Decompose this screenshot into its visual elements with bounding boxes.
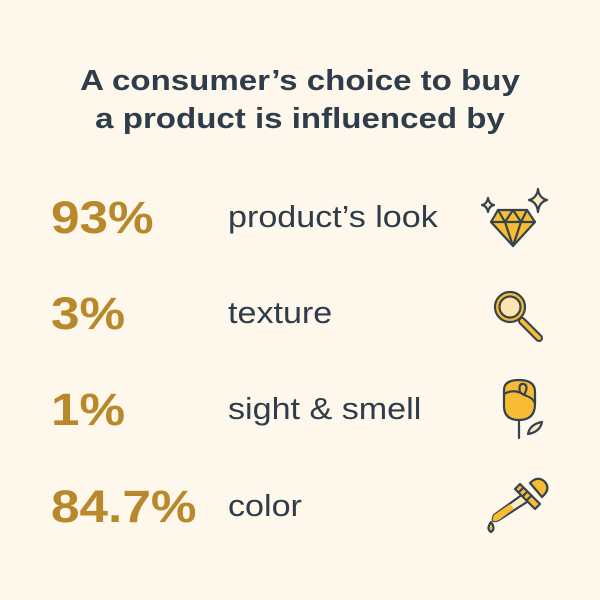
stat: 93%: 93% (51, 192, 154, 243)
stat: 1%: 1% (51, 384, 125, 435)
title (80, 65, 520, 135)
stat: 84.7%: 84.7% (51, 481, 196, 532)
label: product's look: product’s look (228, 199, 438, 234)
stat: 3%: 3% (51, 288, 125, 339)
label: color: color (228, 488, 302, 523)
title: A consumer’s choice to buy (80, 65, 520, 97)
title: a product is influenced by (95, 103, 505, 135)
label: sight & smell: sight & smell (228, 391, 421, 426)
icon: magnifier (495, 292, 539, 338)
icon: dropper (488, 479, 547, 532)
label: texture: texture (228, 295, 332, 330)
icon: rose (504, 380, 542, 438)
icon: diamond (482, 189, 547, 246)
